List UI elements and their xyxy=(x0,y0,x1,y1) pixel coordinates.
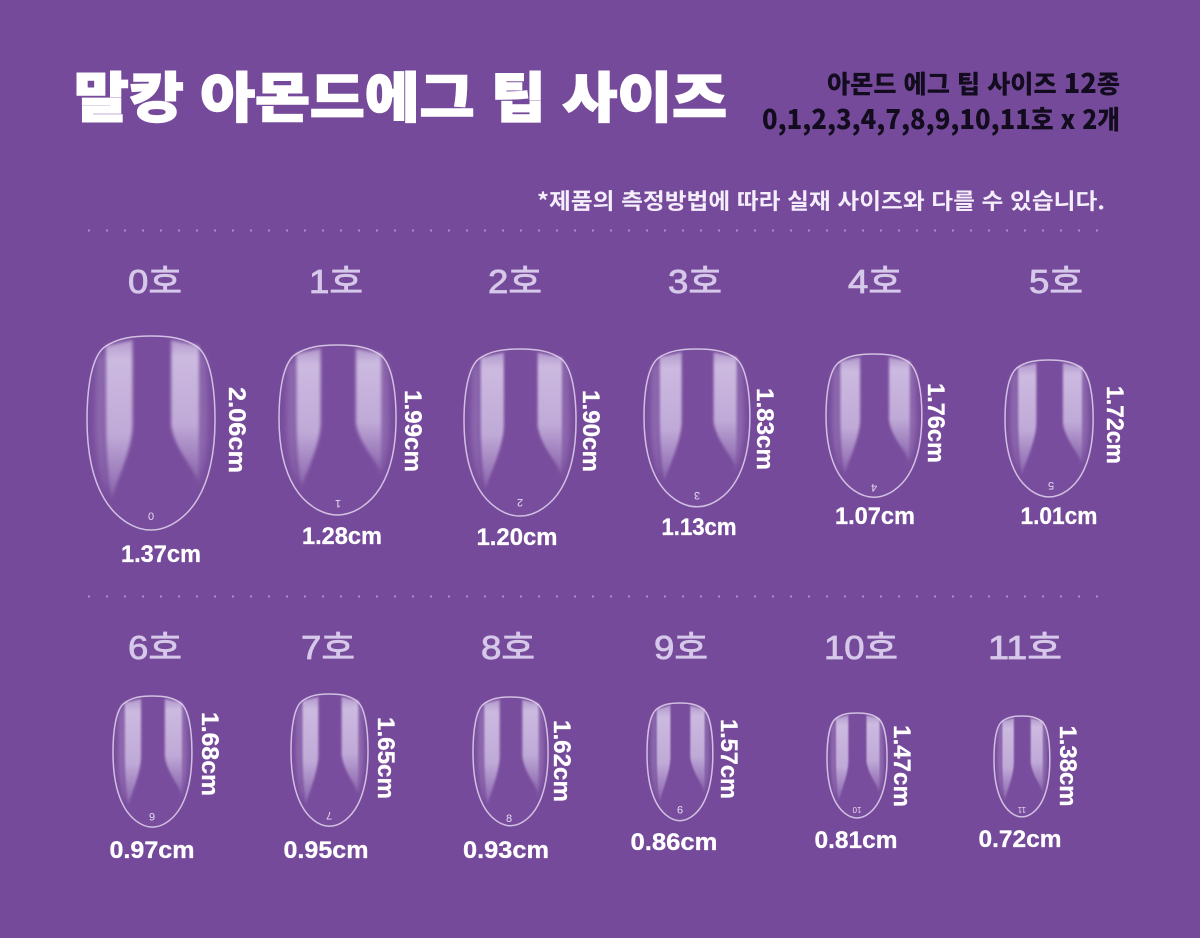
size 10: 1.47cm xyxy=(888,725,915,807)
title: 말캉 아몬드에그 팁 사이즈 xyxy=(74,54,727,133)
size 4: 1.76cm xyxy=(922,383,949,463)
size 2 xyxy=(464,263,604,551)
subtitle: variety summary: 0,1,2,3,4,7,8,9,10,11호 x 2개 xyxy=(762,98,1120,137)
size 1 xyxy=(279,263,426,550)
size 2: 2호 xyxy=(488,263,542,300)
size 6: 0.97cm xyxy=(110,837,194,864)
size 0: 0 xyxy=(148,511,154,523)
size 9: 9 xyxy=(677,803,683,815)
size 7 xyxy=(284,629,399,864)
size 11: 0.72cm xyxy=(978,826,1062,853)
size 4: 4호 xyxy=(848,263,902,300)
size 0: 1.37cm xyxy=(121,541,201,568)
size 3: 3 xyxy=(694,489,700,501)
size 0: 2.06cm xyxy=(223,387,250,473)
size 3: 1.83cm xyxy=(751,388,778,470)
size 8: 0.93cm xyxy=(463,837,549,864)
measurement note: *제품의 측정방법에 따라 실재 사이즈와 다를 수 있습니다. xyxy=(537,184,1105,216)
size 3: 1.13cm xyxy=(662,514,736,541)
size 2: 1.90cm xyxy=(577,390,604,472)
size 1: 1호 xyxy=(309,263,363,300)
size 3: 3호 xyxy=(668,263,722,300)
size 8: 8호 xyxy=(481,629,535,666)
size 1: 1.99cm xyxy=(399,390,426,472)
size 9: 9호 xyxy=(654,629,708,666)
size 10 xyxy=(814,629,915,854)
size 5 xyxy=(1005,263,1128,530)
size 10: 10 xyxy=(852,805,861,814)
size 6: 1.68cm xyxy=(196,712,223,796)
size 9 xyxy=(630,629,742,856)
subtitle: variety summary xyxy=(762,62,1120,137)
size 0: 0호 xyxy=(128,263,182,300)
size 11 xyxy=(978,629,1081,853)
size 7: 1.65cm xyxy=(372,717,399,799)
size 2: 2 xyxy=(517,496,523,508)
size 2: 1.20cm xyxy=(476,524,558,551)
size 6 xyxy=(110,629,223,864)
size 6: 6 xyxy=(149,810,155,822)
size 7: 7 xyxy=(326,809,332,821)
size 1: 1 xyxy=(335,497,341,509)
size 4: 4 xyxy=(871,481,877,493)
size 7: 7호 xyxy=(301,629,355,666)
size 8: 1.62cm xyxy=(548,720,575,802)
size 4: 1.07cm xyxy=(835,503,915,530)
size 6: 6호 xyxy=(128,629,182,666)
size 3 xyxy=(644,263,778,541)
size 10: 10호 xyxy=(824,629,898,666)
size 5: 5호 xyxy=(1029,263,1083,300)
size 9: 0.86cm xyxy=(630,829,718,856)
size 7: 0.95cm xyxy=(284,837,368,864)
size 11: 1.38cm xyxy=(1054,726,1081,806)
size 5: 5 xyxy=(1048,479,1054,491)
size 1: 1.28cm xyxy=(302,523,382,550)
size 8: 8 xyxy=(506,813,512,825)
size 0 xyxy=(87,263,250,568)
size 8 xyxy=(463,629,575,864)
size 4 xyxy=(826,263,949,530)
size 10: 0.81cm xyxy=(814,827,898,854)
size 11: 11호 xyxy=(988,629,1062,666)
size 5: 1.72cm xyxy=(1101,386,1128,464)
size 11: 11 xyxy=(1017,805,1026,814)
size 5: 1.01cm xyxy=(1020,503,1098,530)
size 9: 1.57cm xyxy=(715,719,742,799)
subtitle: variety summary: 아몬드 에그 팁 사이즈 12종 xyxy=(827,62,1120,101)
